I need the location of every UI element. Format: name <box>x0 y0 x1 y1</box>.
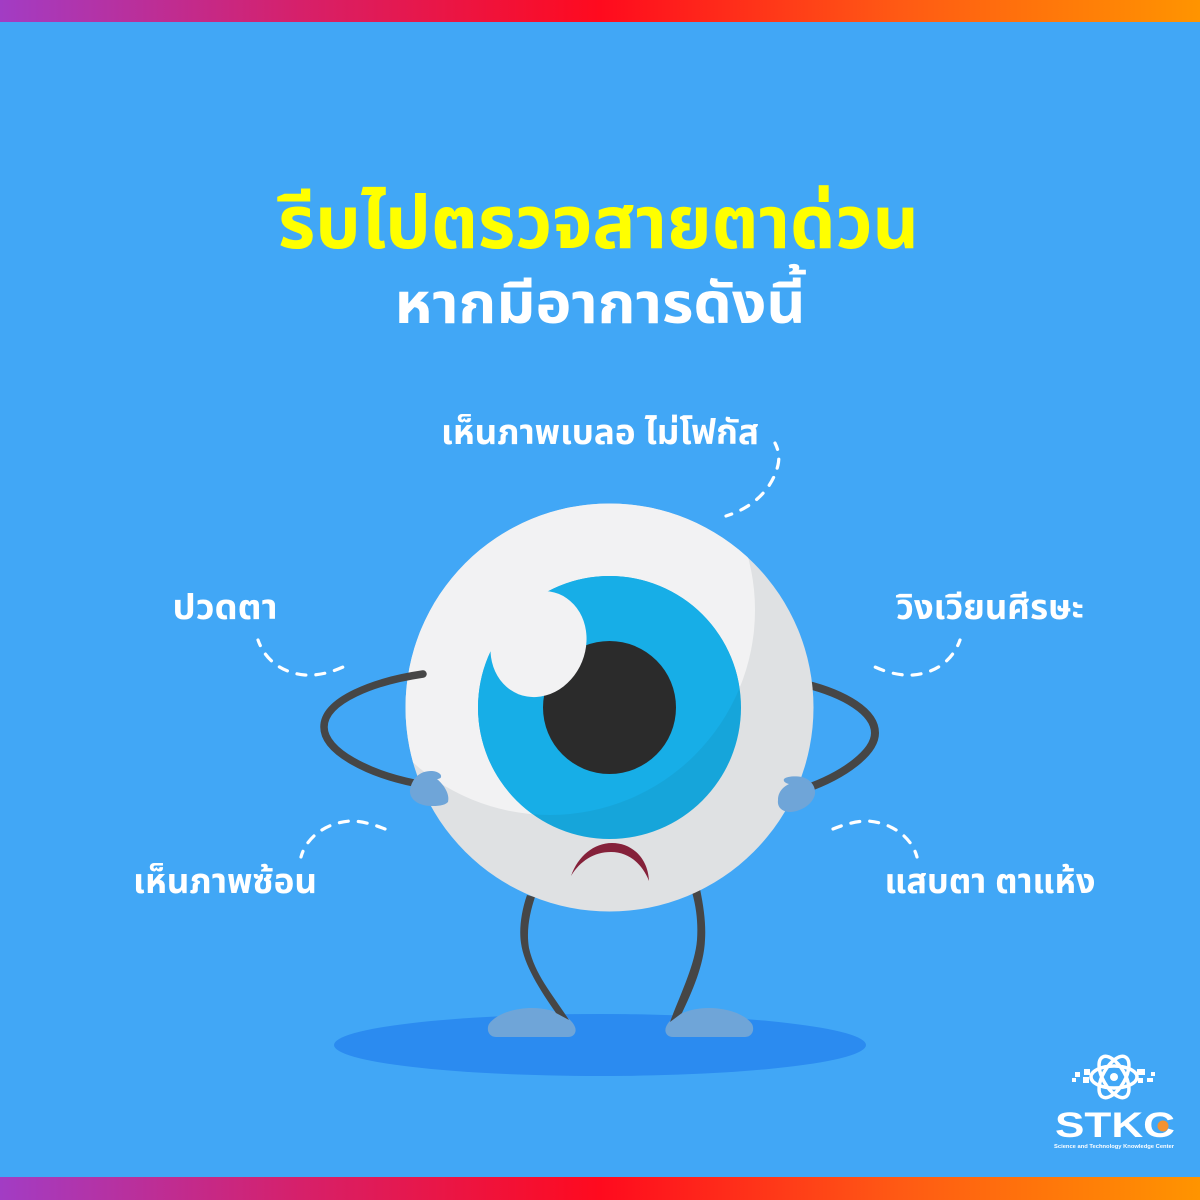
logo: STKC <box>1054 1052 1175 1150</box>
dashed line: double vision <box>301 821 385 857</box>
right foot <box>665 1008 753 1037</box>
right arm <box>805 684 875 789</box>
logo tagline: Science and Technology Knowledge Center <box>1054 1144 1175 1150</box>
bottom gradient bar <box>0 1177 1200 1200</box>
top gradient bar <box>0 0 1200 22</box>
pupil <box>543 641 676 774</box>
dashed line: dizziness <box>875 640 960 675</box>
right leg <box>670 889 705 1022</box>
left foot <box>488 1008 576 1037</box>
label: dizziness: วิงเวียนศีรษะ <box>896 582 1084 635</box>
logo wordmark: STKC <box>1055 1106 1175 1145</box>
right hand <box>778 776 815 812</box>
eyeball light area <box>406 504 755 814</box>
dashed line: eye pain <box>258 640 343 675</box>
label: double vision: เห็นภาพซ้อน <box>133 856 317 909</box>
left leg <box>520 895 569 1020</box>
left arm <box>324 674 423 783</box>
character: eyeball mascot <box>320 504 879 1037</box>
iris light area <box>478 576 740 815</box>
title: รีบไปตรวจสายตาด่วน <box>277 170 919 282</box>
logo orange dot <box>1158 1120 1168 1132</box>
eyeball shaded base <box>406 504 814 912</box>
label: eye pain: ปวดตา <box>172 582 278 635</box>
dashed line: stinging dry eyes <box>833 821 917 857</box>
label: stinging dry eyes: แสบตา ตาแห้ง <box>884 856 1096 909</box>
sad mouth <box>571 843 649 881</box>
logo pixel squares <box>1072 1069 1155 1083</box>
dashed line: blurred vision <box>726 443 779 516</box>
ground shadow <box>334 1014 866 1076</box>
iris <box>478 576 741 839</box>
label: blurred vision: เห็นภาพเบลอ ไม่โฟกัส <box>441 407 759 460</box>
subtitle: หากมีอาการดังนี้ <box>394 263 806 349</box>
eye highlight <box>475 576 602 712</box>
logo atom icon <box>1091 1052 1137 1102</box>
left hand <box>410 771 448 806</box>
